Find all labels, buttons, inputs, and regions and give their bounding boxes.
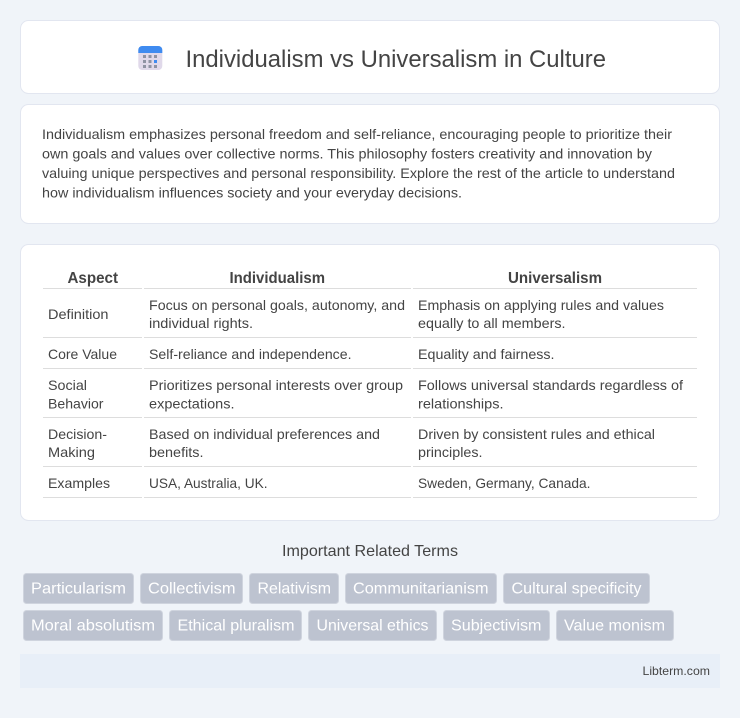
row: core value: Core Value (48, 346, 117, 362)
row: core value: Equality and fairness. (418, 346, 554, 362)
tag: collectivism: Collectivism (148, 580, 236, 598)
tag: subjectivism: Subjectivism (451, 618, 542, 634)
row: social behavior: Social (48, 377, 87, 393)
row: definition: Focus on personal goals, autonomy, and (149, 297, 405, 313)
tag: moral absolutism (24, 610, 162, 640)
tag: collectivism (140, 574, 242, 604)
panel: intro paragraph: how individualism influences society and your everyday decisions. (42, 184, 462, 200)
row: definition: equally to all members. (418, 315, 566, 331)
row: social behavior: Follows universal standards regardless of (418, 377, 683, 393)
table header row: Universalism (508, 270, 602, 287)
row: examples: Sweden, Germany, Canada. (418, 475, 590, 491)
tag: cultural specificity: Cultural specificity (512, 580, 642, 598)
row: decision-making: Making (48, 444, 95, 460)
row: examples: Examples (48, 475, 110, 491)
tag: particularism: Particularism (31, 580, 126, 598)
row: definition: Emphasis on applying rules and values (418, 297, 664, 313)
row: social behavior: Prioritizes personal interests over group (149, 377, 403, 393)
row: definition: individual rights. (149, 315, 253, 331)
table header row: Aspect (68, 270, 119, 287)
panel: intro paragraph (20, 104, 720, 224)
tag: moral absolutism: Moral absolutism (31, 618, 155, 634)
row: definition: Definition (48, 306, 108, 322)
panel: intro paragraph: own goals and values over collective norms. This philosophy fosters creativity and innovation by (42, 146, 652, 162)
row: decision-making: principles. (418, 444, 482, 460)
tag: universal ethics: Universal ethics (316, 618, 428, 634)
row: decision-making: benefits. (149, 444, 204, 460)
row: decision-making: Decision- (48, 426, 107, 442)
panel: intro paragraph: Individualism emphasizes personal freedom and self-reliance, encouraging people to prioritize their (42, 126, 672, 142)
heading: important related terms: Important Related Terms (282, 543, 458, 560)
row: social behavior: relationships. (418, 396, 504, 412)
tag: particularism (24, 574, 134, 604)
tag: value monism (556, 610, 674, 640)
row: social behavior: expectations. (149, 396, 234, 412)
tag: communitarianism: Communitarianism (353, 580, 488, 598)
title: Individualism vs Universalism in Culture (186, 46, 606, 73)
row: core value: Self-reliance and independence. (149, 346, 352, 362)
tag: relativism: Relativism (258, 580, 331, 598)
related term tags (24, 574, 674, 640)
tag: subjectivism (444, 610, 550, 640)
row: examples: USA, Australia, UK. (149, 475, 268, 491)
row: decision-making: Driven by consistent rules and ethical (418, 426, 655, 442)
row: social behavior: Behavior (48, 396, 104, 412)
row: decision-making (48, 426, 655, 460)
table header row: Individualism (230, 270, 325, 287)
tag: value monism: Value monism (564, 618, 665, 634)
header panel (20, 20, 720, 94)
row: definition (48, 297, 664, 331)
row: social behavior (48, 377, 683, 412)
row: core value (48, 346, 554, 362)
footer (20, 654, 720, 688)
panel: comparison table (20, 244, 720, 520)
row: decision-making: Based on individual preferences and (149, 426, 380, 442)
footer: Libterm.com (642, 664, 710, 678)
row: examples (48, 475, 590, 491)
tag: universal ethics (308, 610, 436, 640)
tag: communitarianism (346, 574, 496, 604)
tag: relativism (250, 574, 338, 604)
tag: cultural specificity (504, 574, 650, 604)
icon: calendar (138, 46, 162, 70)
panel: intro paragraph: valuing unique perspectives and personal responsibility. Explore the rest of the article to understand (42, 165, 675, 181)
table header row (68, 270, 602, 287)
tag: ethical pluralism: Ethical pluralism (178, 618, 294, 634)
tag: ethical pluralism (170, 610, 302, 640)
